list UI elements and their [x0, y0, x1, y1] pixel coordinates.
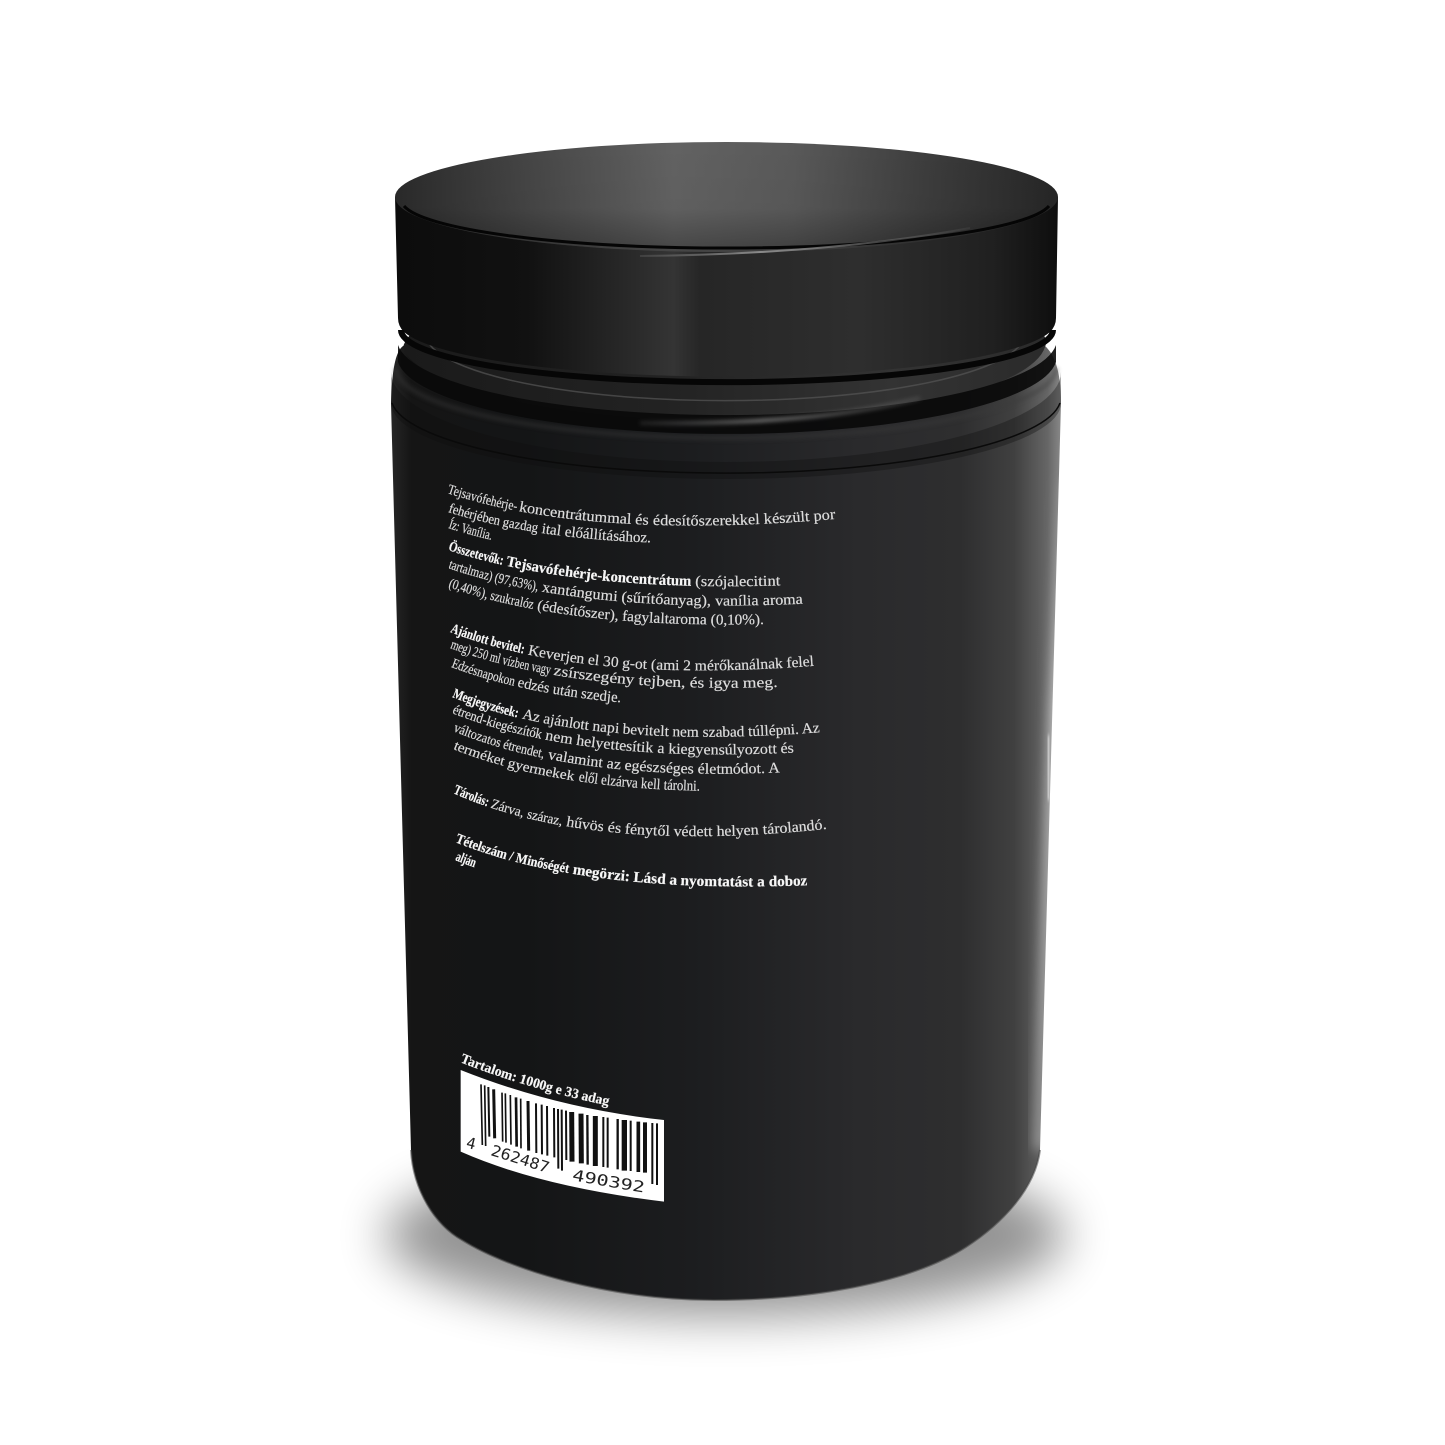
label text: product description: Íz: Vanília. — [448, 517, 491, 540]
label text: batch number and best before: alján — [456, 852, 476, 868]
label text: ingredients: (0,40%), szukralóz(édesítőszer), fagylaltaroma (0,10%). — [448, 578, 763, 628]
label text: ingredients: tartalmaz) (97,63%),xantángumi (sűrítőanyag), vanília aroma — [448, 560, 803, 609]
barcode digits — [464, 1134, 644, 1192]
barcode digits: 490392 — [573, 1170, 644, 1192]
barcode digits: 262487 — [491, 1145, 550, 1172]
label text: notes — [452, 688, 820, 791]
jar — [391, 142, 1064, 1300]
label text: product description: Tejsavófehérje-koncentrátummal és édesítőszerekkel készült por — [448, 484, 836, 526]
jar lid top — [395, 142, 1058, 256]
barcode background — [461, 1070, 664, 1202]
barcode — [460, 1070, 664, 1202]
label text: recommended intake: meg) 250 ml vízben vagyzsírszegény tejben, és igya meg. — [450, 642, 777, 692]
label text: net content: Tartalom: 1000g e 33 adag — [462, 1053, 610, 1108]
label text: notes: változatos étrendet,valamint az egészséges életmódot. A — [455, 724, 780, 776]
jar neck — [398, 330, 1056, 434]
jar shadow — [385, 1153, 1065, 1317]
label text: recommended intake — [450, 624, 814, 704]
barcode bars — [481, 1084, 657, 1185]
label text: recommended intake: Ajánlott bevitel:Keverjen el 30 g-ot (ami 2 mérőkanálnak felel — [450, 624, 814, 673]
label text: product description: fehérjében gazdagital előállításához. — [448, 503, 650, 543]
label text: storage: Tárolás:Zárva, száraz,hűvös és fénytől védett helyen tárolandó. — [454, 784, 826, 839]
barcode digits: 4 — [464, 1134, 478, 1153]
jar lid side — [395, 197, 1058, 382]
label text: notes: étrend-kiegészítőknem helyettesítik a kiegyensúlyozott és — [453, 705, 794, 758]
label text: ingredients: Összetevők:Tejsavófehérje-koncentrátum(szójalecitint — [449, 540, 780, 590]
jar body — [391, 346, 1064, 1300]
label text: batch number and best before: Tételszám / Minőségétmegörzi: Lásd a nyomtatást a doboz — [456, 833, 808, 889]
label text: notes: terméket gyermekekelől elzárva kell tárolni. — [454, 742, 700, 791]
label text: notes: Megjegyzések:Az ajánlott napi bevitelt nem szabad túllépni. Az — [452, 688, 820, 738]
label text: ingredients — [448, 540, 803, 628]
label text: recommended intake: Edzésnapokonedzés után szedje. — [451, 658, 620, 704]
